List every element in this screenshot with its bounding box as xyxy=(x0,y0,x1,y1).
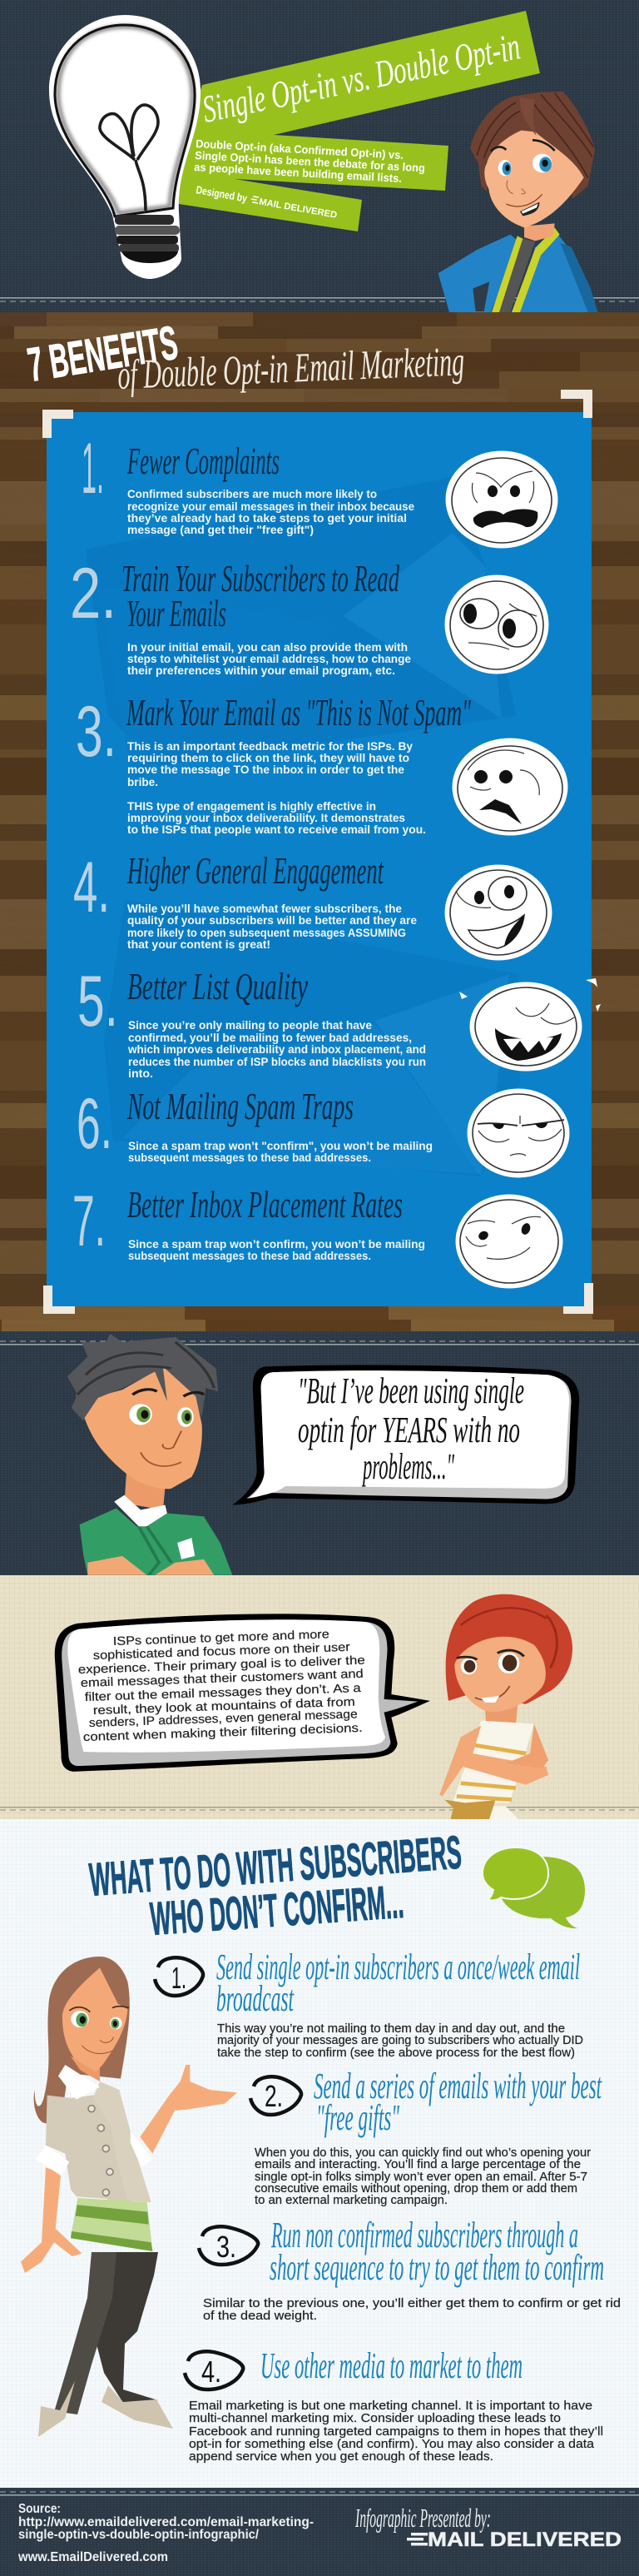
benefit 5: Better List Quality xyxy=(127,965,308,1007)
speech bubble: ISPs continue: content when making their filtering decisions. xyxy=(83,1722,363,1744)
speech bubble: but I've been using single optin xyxy=(232,1365,579,1505)
step 4: append service when you get enough of these leads. xyxy=(189,2450,493,2464)
benefit 3: 3. xyxy=(76,692,116,772)
benefit 2: 2. xyxy=(70,554,116,634)
icon: number 1 ring xyxy=(155,1957,203,1996)
benefit 2: Your Emails xyxy=(126,592,226,634)
panel: header section xyxy=(0,0,639,312)
icon: unimpressed face xyxy=(470,1092,567,1175)
benefit 5: into. xyxy=(128,1067,153,1080)
step 2: single opt-in folks simply won’t ever open an email. After 5-7 xyxy=(255,2171,587,2184)
benefit 2: Train Your Subscribers to Read xyxy=(121,557,400,599)
step 4: opt-in for something else (and confirm). You may also consider a data xyxy=(189,2438,595,2451)
icon: number 1 ring: 1. xyxy=(171,1961,186,1995)
panel: footer xyxy=(0,2488,639,2576)
source text: www.EmailDelivered.com xyxy=(17,2550,168,2564)
step 1 xyxy=(155,1947,583,2060)
benefit 7: Better Inbox Placement Rates xyxy=(127,1183,403,1226)
benefit 7: Since a spam trap won’t confirm, you won’t be mailing xyxy=(128,1237,425,1251)
panel: what to do section xyxy=(0,1819,639,2488)
benefit 4: more likely to open subsequent messages ASSUMING xyxy=(127,926,406,939)
step 2: When you do this, you can quickly find out who’s opening your xyxy=(255,2146,591,2160)
step 1: This way you’re not mailing to them day in and day out, and the xyxy=(217,2022,565,2036)
icon: laughing face xyxy=(459,978,601,1068)
icon: light bulb xyxy=(49,15,201,279)
benefit 4: Higher General Engagement xyxy=(126,849,384,892)
benefit 2 xyxy=(70,554,546,677)
character: woman presenting xyxy=(21,1957,237,2437)
step 3: Similar to the previous one, you’ll either get them to confirm or get rid xyxy=(203,2297,621,2310)
speech bubble: but I've been using single optin: problems..." xyxy=(361,1446,454,1487)
panel: skeptic section xyxy=(0,1331,639,1575)
benefit 3: to the ISPs that people want to receive email from you. xyxy=(127,823,426,836)
benefit 3 xyxy=(76,691,565,836)
speech bubble: ISPs continue xyxy=(55,1614,430,1772)
benefit 5 xyxy=(77,962,601,1080)
benefit 4: 4. xyxy=(73,848,110,927)
intro text: Double Opt-in (aka Confirmed Opt-in) vs. xyxy=(196,137,404,162)
character: boy in blue jacket xyxy=(438,92,597,312)
step 1: broadcast xyxy=(216,1978,295,2019)
benefit 6: 6. xyxy=(77,1084,112,1164)
step 4 xyxy=(185,2345,603,2464)
benefit 5: reduces the number of ISP blocks and blacklists you run xyxy=(128,1055,426,1068)
step 2: "free gifts" xyxy=(316,2097,399,2138)
icon: green speech bubbles xyxy=(483,1847,585,1928)
intro text: Single Opt-in has been the debate for as long xyxy=(195,149,425,174)
benefit 1: message (and get their "free gift") xyxy=(127,523,314,536)
intro text: as people have been building email lists. xyxy=(194,161,402,185)
icon: number 2 ring: 2. xyxy=(265,2079,283,2113)
character: man in green shirt xyxy=(67,1334,232,1575)
benefit 1: they’ve already had to take steps to get your initial xyxy=(127,511,407,525)
benefit 6 xyxy=(77,1084,567,1175)
benefit 2: steps to whitelist your email address, how to change xyxy=(127,652,411,665)
speech bubble: ISPs continue: filter out the email messages they don’t. As a xyxy=(85,1682,362,1704)
source text: http://www.emaildelivered.com/email-marketing- xyxy=(18,2515,314,2529)
source text: Source: xyxy=(18,2502,61,2516)
icon: number 4 ring xyxy=(185,2351,243,2390)
benefit 6: Since a spam trap won’t "confirm", you won’t be mailing xyxy=(128,1139,433,1152)
benefit 2: In your initial email, you can also provide them with xyxy=(127,640,408,654)
green title banners xyxy=(179,11,540,231)
benefit 3: THIS type of engagement is highly effective in xyxy=(127,799,376,813)
designed by credit: Designed by xyxy=(195,183,249,205)
benefit 3: bribe. xyxy=(127,775,158,788)
icon: number 3 ring: 3. xyxy=(216,2230,236,2264)
presented by logo xyxy=(355,2503,622,2551)
benefit 4: While you’ll have somewhat fewer subscribers, the xyxy=(127,902,402,915)
benefit 7 xyxy=(72,1181,560,1286)
benefit 7: subsequent messages to these bad addresses. xyxy=(128,1249,371,1262)
benefit 1: Confirmed subscribers are much more likely to xyxy=(127,487,377,500)
icon: confused face xyxy=(448,578,546,671)
benefit 6: Not Mailing Spam Traps xyxy=(126,1085,354,1127)
step 3 xyxy=(199,2215,621,2323)
speech bubble: ISPs continue: experience. Their primary goal is to deliver the xyxy=(78,1654,365,1677)
presented by logo: MAIL DELIVERED xyxy=(428,2529,622,2551)
benefit 4: quality of your subscribers will be better and they are xyxy=(127,913,417,927)
character: red-haired woman xyxy=(439,1594,572,1819)
speech bubble: ISPs continue: email messages that their customers want and xyxy=(81,1668,364,1690)
benefit 3: improving your inbox deliverability. It demonstrates xyxy=(127,811,405,824)
benefit 5: confirmed, you’ll be mailing to fewer bad addresses, xyxy=(128,1031,412,1044)
benefit 2: their preferences within your email program, etc. xyxy=(127,664,395,677)
step 4: Facebook and running targeted campaigns to them in hopes that they’ll xyxy=(189,2425,603,2439)
step 2: emails and interacting. You’ll find a large percentage of the xyxy=(255,2158,581,2171)
benefit 7: 7. xyxy=(72,1181,106,1261)
panel: blue benefits card xyxy=(42,390,601,1314)
benefit 1: Fewer Complaints xyxy=(126,440,280,482)
benefit 3: move the message TO the inbox in order to get the xyxy=(127,763,404,776)
benefit 1: 1. xyxy=(82,429,104,509)
step 2: consecutive emails without opening, drop them or add them xyxy=(255,2182,577,2196)
step 2: to an external marketing campaign. xyxy=(255,2194,448,2207)
icon: number 3 ring xyxy=(199,2226,258,2265)
benefit 5: Since you’re only mailing to people that have xyxy=(128,1018,372,1032)
heading: what to do with subscribers xyxy=(87,1826,463,1945)
benefit 1 xyxy=(82,429,555,545)
step 1: majority of your messages are going to subscribers who actually DID xyxy=(217,2034,583,2047)
step 4: Email marketing is but one marketing channel. It is important to have xyxy=(189,2399,592,2413)
presented by logo: Infographic Presented by: xyxy=(355,2503,491,2533)
step 1: take the step to confirm (see the above process for the best flow) xyxy=(217,2046,575,2060)
benefit 4 xyxy=(73,848,549,957)
designed by credit xyxy=(195,183,339,221)
source text xyxy=(17,2502,314,2564)
designed by credit: MAIL DELIVERED xyxy=(258,197,338,221)
icon: smirking face xyxy=(458,1197,560,1286)
benefit 3: requiring them to click on the link, they will have to xyxy=(127,751,409,764)
speech bubble: ISPs continue: ISPs continue to get more and more xyxy=(113,1628,329,1649)
speech bubble: ISPs continue: result, they look at mountains of data from xyxy=(93,1696,355,1718)
step 4: multi-channel marketing mix. Consider uploading these leads to xyxy=(189,2412,561,2425)
heading: 7 benefits xyxy=(24,316,465,398)
corner brackets xyxy=(42,390,593,1314)
benefit 3: This is an important feedback metric for the ISPs. By xyxy=(127,739,413,753)
panel: wood benefits section xyxy=(0,312,639,1331)
benefit 6: subsequent messages to these bad addresses. xyxy=(128,1151,371,1164)
speech bubble: ISPs continue: sophisticated and focus more on their user xyxy=(93,1641,350,1663)
panel: ISP explanation section xyxy=(0,1575,639,1819)
icon: number 4 ring: 4. xyxy=(201,2355,221,2389)
icon: number 2 ring xyxy=(250,2076,301,2115)
source text: single-optin-vs-double-optin-infographic/ xyxy=(18,2528,260,2542)
step 3: of the dead weight. xyxy=(203,2310,317,2323)
step 2 xyxy=(250,2066,602,2207)
benefit 5: 5. xyxy=(77,962,118,1042)
benefit 1: recognize your email messages in their inbox because xyxy=(127,500,414,513)
icon: angry face xyxy=(448,454,555,545)
icon: grinning face xyxy=(448,868,549,957)
speech bubble: ISPs continue: senders, IP addresses, even general message xyxy=(89,1708,358,1730)
heading: 7 benefits: 7 BENEFITS xyxy=(24,316,181,392)
intro text xyxy=(194,137,425,185)
benefit 5: which improves deliverability and inbox placement, and xyxy=(127,1042,426,1056)
benefit 4: that your content is great! xyxy=(127,937,270,951)
icon: worried face xyxy=(455,741,565,833)
